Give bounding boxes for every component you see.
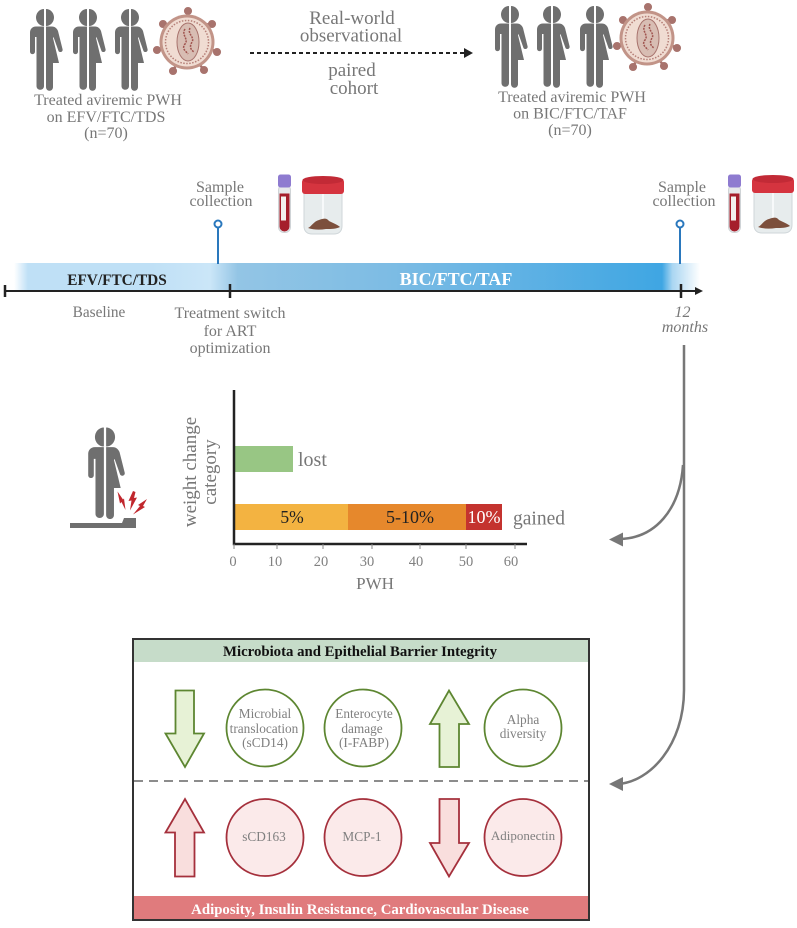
tick labels: 60 — [504, 554, 518, 570]
band label: BIC/FTC/TAF: BIC/FTC/TAF — [400, 269, 512, 289]
panel heading: adiposity: Adiposity, Insulin Resistance, Cardiovascular Disease — [191, 902, 529, 918]
icon: stool jar right — [752, 175, 794, 233]
circle: MCP-1 — [324, 799, 402, 876]
bar: gained 10%: 10% — [468, 507, 500, 527]
sample label right: collection — [652, 193, 716, 210]
circle: sCD163 — [226, 799, 304, 876]
tick labels: 40 — [409, 554, 423, 570]
connector arrows — [609, 345, 684, 791]
axes — [234, 390, 527, 544]
study design label top: observational — [300, 26, 402, 46]
circle: enterocyte damage — [324, 690, 402, 766]
icon: red bolts — [118, 491, 147, 514]
circle: microbial translocation: (sCD14) — [242, 735, 288, 750]
circle: enterocyte damage: (I-FABP) — [339, 735, 389, 750]
text: baseline cohort: (n=70) — [84, 125, 128, 142]
bar: gained 5-10%: 5-10% — [386, 507, 434, 527]
sample label right: Sample — [658, 179, 706, 196]
circle: sCD163: sCD163 — [242, 829, 286, 844]
cohort group right: people and virus — [495, 4, 680, 88]
panel: biomarkers — [133, 639, 589, 920]
circle: MCP-1: MCP-1 — [342, 829, 382, 844]
tick labels: 30 — [360, 554, 374, 570]
circle: enterocyte damage: damage — [341, 721, 383, 736]
arrow: down green — [166, 690, 204, 767]
label: gained: gained — [513, 508, 565, 530]
y axis title: weight change — [180, 417, 201, 527]
sample label left: collection — [189, 193, 253, 210]
arrow: up green — [430, 690, 469, 767]
study design label bottom: paired — [328, 60, 376, 81]
circle: alpha diversity — [484, 690, 562, 766]
label: treatment switch: Treatment switch — [175, 305, 285, 322]
x axis title: PWH — [356, 574, 394, 593]
bar chart: weight change — [180, 390, 565, 593]
icon: stool jar left — [302, 176, 344, 234]
tick labels: 20 — [314, 554, 328, 570]
timeline axis — [5, 284, 703, 298]
bar: lost — [235, 446, 293, 472]
text: follow-up cohort: (n=70) — [548, 122, 592, 139]
label: 12 months: 12 — [674, 304, 690, 321]
tick labels: 0 — [229, 554, 237, 570]
sample pin left — [214, 220, 222, 264]
bar: gained 5% — [235, 504, 348, 530]
timeline band — [10, 263, 700, 291]
icon: blood tube right — [728, 174, 741, 232]
cohort group left: people and virus — [30, 8, 220, 91]
text: baseline cohort: Treated aviremic PWH — [34, 92, 182, 109]
label: treatment switch: optimization — [190, 340, 270, 357]
bar: gained 5-10% — [348, 504, 466, 530]
arrow: up red — [166, 799, 204, 876]
sample pin right — [676, 220, 684, 264]
label: 12 months: months — [662, 319, 708, 336]
tick labels: 50 — [459, 554, 473, 570]
icon: person on scale — [70, 428, 147, 528]
tick labels: 10 — [268, 554, 282, 570]
band label: EFV/FTC/TDS: EFV/FTC/TDS — [67, 272, 167, 289]
text: follow-up cohort: Treated aviremic PWH — [498, 89, 646, 106]
circle: adiponectin — [484, 799, 562, 876]
circle: alpha diversity: Alpha — [507, 712, 539, 727]
icon: virus left — [154, 8, 220, 74]
circle: microbial translocation — [226, 690, 304, 766]
circle: microbial translocation: translocation — [230, 721, 299, 736]
dashed arrow — [250, 48, 473, 58]
panel heading: microbiota — [134, 640, 588, 662]
study design label top: Real-world — [309, 8, 395, 29]
circle: enterocyte damage: Enterocyte — [335, 706, 393, 721]
sample label left: Sample — [196, 179, 244, 196]
circle: adiponectin: Adiponectin — [491, 828, 556, 843]
label: lost: lost — [298, 449, 327, 471]
bar: gained 5%: 5% — [280, 507, 304, 527]
panel heading: adiposity — [134, 896, 588, 919]
label: baseline: Baseline — [73, 304, 126, 321]
label: treatment switch: for ART — [204, 323, 257, 340]
circle: alpha diversity: diversity — [500, 726, 547, 741]
circle: microbial translocation: Microbial — [239, 706, 292, 721]
icon: blood tube left — [278, 174, 291, 232]
text: baseline cohort: on EFV/FTC/TDS — [47, 109, 165, 126]
icon: virus right — [614, 4, 680, 70]
text: follow-up cohort: on BIC/FTC/TAF — [513, 106, 627, 122]
tick labels — [229, 554, 518, 570]
study design label bottom: cohort — [330, 78, 379, 99]
y axis title: category — [200, 439, 221, 505]
arrow: down red — [430, 799, 469, 876]
panel heading: microbiota: Microbiota and Epithelial Barrier Integrity — [223, 644, 498, 660]
